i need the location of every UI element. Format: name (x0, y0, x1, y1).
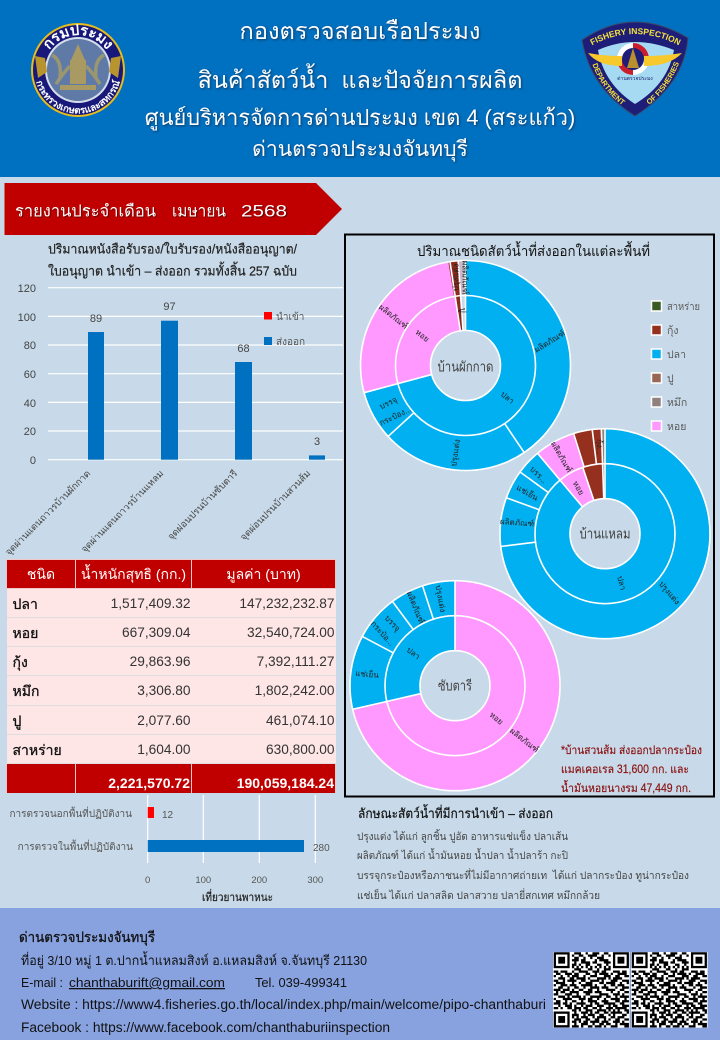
bar chart: certificates by checkpoint: 97 (163, 301, 176, 313)
axis labels: checkpoints (3, 468, 313, 558)
legend: species: สาหร่าย (667, 301, 700, 313)
axis labels: checkpoints: จุดผ่อนปรนบ้านซับตารี (165, 468, 240, 543)
bar chart: vehicle trips: 100 (195, 875, 211, 886)
ring labels: แช่เย็น (355, 668, 380, 680)
note: Ban Suan Som exports: แมคเคอเรล 31,600 กก. และ (561, 764, 689, 776)
centre label: Ban Phak Kat: บ้านผักกาด (438, 358, 494, 374)
bar chart: vehicle trips: 280 (313, 843, 330, 854)
table: weight and value by species: 2,077.60 (137, 713, 190, 728)
ring labels: แช่เย็น (515, 482, 541, 503)
ring labels: ปรุงแต่ง (657, 580, 682, 606)
chart title: certificates: ใบอนุญาต นำเข้า – ส่งออก รวมทั้งสิ้น 257 ฉบับ (48, 262, 297, 280)
ring labels: ผลิตภัณฑ์ (460, 260, 470, 295)
panel: species exported per area (345, 234, 714, 796)
text block: product characteristics: บรรจุกระป๋องหรือภาชนะที่ไม่มีอากาศถ่ายเท ได้แก่ ปลากระป๋อง ทูน่ากระป๋อง (357, 868, 689, 882)
footer contact text: E-mail : (21, 975, 63, 990)
ring labels: ผลิตภัณฑ์ (508, 726, 541, 754)
legend: species: ปู (667, 373, 674, 385)
ring labels: ผลิตภัณฑ์ (500, 516, 534, 528)
ring labels: ผลิตภัณฑ์ (532, 328, 567, 355)
bar chart: vehicle trips: 300 (307, 875, 323, 886)
text block: product characteristics: ผลิตภัณฑ์ ได้แก่ น้ำมันหอย น้ำปลา น้ำปลาร้า กะปิ (357, 848, 568, 862)
table: weight and value by species: 1,802,242.00 (255, 683, 334, 698)
legend: species: กุ้ง (667, 325, 678, 337)
bar chart: vehicle trips: การตรวจนอกพื้นที่ปฏิบัติงาน (9, 806, 132, 820)
bar chart: certificates by checkpoint: 80 (24, 340, 36, 352)
ring labels: บรรจุ (383, 614, 402, 634)
table: weight and value by species: 1,517,409.32 (111, 596, 190, 611)
ring labels: ปรุงแต่ง (434, 584, 447, 613)
title line 1: กองตรวจสอบเรือประมง (240, 19, 480, 45)
ring labels: ปลา (405, 645, 422, 661)
centre label: Ban Laem: บ้านแหลม (580, 526, 630, 542)
ring labels: ปรุงแต่ง (449, 439, 462, 467)
banner: monthly report: รายงานประจำเดือน (15, 202, 156, 220)
footer contact text (19, 929, 546, 1035)
legend: species: หอย (667, 421, 686, 433)
footer band (0, 908, 720, 1040)
chart title: certificates (48, 242, 297, 280)
legend: bar chart: ส่งออก (276, 337, 305, 348)
bar chart: certificates by checkpoint: 100 (18, 312, 36, 324)
bar chart: certificates by checkpoint: 0 (30, 455, 36, 467)
axis labels: checkpoints: จุดผ่านแดนถาวรบ้านแหลม (79, 468, 166, 555)
table: weight and value by species: สาหร่าย (12, 742, 62, 758)
bar chart: vehicle trips: 12 (162, 810, 174, 821)
ring labels: ปลา (615, 575, 628, 591)
legend: species: ปลา (667, 349, 686, 361)
banner: monthly report (4, 183, 342, 235)
axis title: เที่ยวยานพาหนะ (202, 889, 273, 904)
ring labels: หอย (571, 479, 586, 497)
table: weight and value by species: 3,306.80 (137, 683, 190, 698)
donut: Ban Laem (482, 410, 720, 657)
bar chart: certificates by checkpoint: 3 (314, 436, 320, 448)
bar chart: certificates by checkpoint (3, 283, 343, 558)
text block: product characteristics (357, 829, 689, 902)
title line 3: ศูนย์บริหารจัดการด่านประมง เขต 4 (สระแก้ว) (145, 105, 575, 130)
logo: fishery inspection shield: FISHERY INSPECTION (590, 28, 681, 46)
note: Ban Suan Som exports (561, 744, 702, 795)
logo: department of fisheries seal: กระทรวงเกษตรและสหกรณ์ (36, 78, 120, 114)
footer contact text: Website : https://www4.fisheries.go.th/local/index.php/main/welcome/pipo-chanthaburi (21, 997, 546, 1012)
legend: bar chart: นำเข้า (276, 311, 304, 323)
bar chart: vehicle trips: การตรวจในพื้นที่ปฏิบัติงาน (18, 839, 133, 853)
bar chart: vehicle trips (9, 795, 330, 904)
donut: Ban Phak Kat (358, 258, 573, 473)
ring labels: ปลา (499, 390, 516, 406)
panel heading: ปริมาณชนิดสัตว์น้ำที่ส่งออกในแต่ละพื้นที่ (417, 241, 650, 259)
legend: species: หมึก (667, 397, 687, 409)
title line 2: สินค้าสัตว์น้ำ และปัจจัยการผลิต (198, 67, 522, 93)
bar chart: certificates by checkpoint: 20 (24, 426, 36, 438)
logo: fishery inspection shield (582, 22, 688, 116)
QR code 1 (553, 952, 630, 1028)
chart title: certificates: ปริมาณหนังสือรับรอง/ใบรับรอง/หนังสืออนุญาต/ (48, 242, 297, 258)
ring labels (500, 439, 682, 606)
bar chart: certificates by checkpoint: 89 (90, 313, 102, 325)
bar chart: certificates by checkpoint: 40 (24, 398, 36, 410)
bar chart: certificates by checkpoint: 68 (237, 343, 250, 355)
table: weight and value by species: 29,863.96 (130, 654, 190, 669)
footer contact text: chanthaburift@gmail.com (69, 975, 225, 990)
logo: department of fisheries seal (31, 23, 125, 117)
QR code 2 (631, 952, 708, 1028)
heading: product characteristics: ลักษณะสัตว์น้ำที่มีการนำเข้า – ส่งออก (358, 804, 553, 821)
ring labels: ปรุงแต่ง (452, 264, 461, 291)
ring labels: กุ้ง... (595, 439, 604, 454)
table: weight and value by species: 32,540,724.00 (247, 625, 334, 640)
table: weight and value by species: กุ้ง (12, 654, 28, 670)
ring labels: ผลิตภัณฑ์ (377, 302, 410, 331)
ring labels: บรรจุ (378, 395, 399, 411)
banner: monthly report: 2568 (241, 202, 287, 220)
table: weight and value by species: 2,221,570.72 (108, 775, 190, 791)
table: weight and value by species (6, 559, 336, 793)
ring labels: กระป๋อง... (378, 405, 413, 428)
bar chart: vehicle trips: 0 (145, 875, 150, 886)
table: weight and value by species: หมึก (12, 683, 39, 699)
logo: fishery inspection shield: DEPARTMENT (592, 63, 626, 104)
text block: product characteristics: แช่เย็น ได้แก่ ปลาสลิด ปลาสวาย ปลายี่สกเทศ หมึกกล้วย (357, 888, 600, 902)
table: weight and value by species: 667,309.04 (122, 625, 190, 640)
table: weight and value by species: 630,800.00 (266, 742, 334, 757)
banner: monthly report: เมษายน (172, 202, 226, 220)
table: weight and value by species: หอย (12, 625, 38, 641)
bar chart: vehicle trips: 200 (251, 875, 267, 886)
table: weight and value by species: 7,392,111.27 (257, 654, 334, 669)
axis labels: checkpoints: จุดผ่อนปรนบ้านสวนส้ม (238, 468, 313, 543)
table: weight and value by species: 1,604.00 (137, 742, 190, 757)
ring labels (355, 584, 541, 754)
bar chart: certificates by checkpoint: 60 (24, 369, 36, 381)
footer contact text: Facebook : https://www.facebook.com/chanthaburiinspection (21, 1020, 390, 1035)
logo: fishery inspection shield: OF FISHERIES (646, 62, 679, 104)
header band (0, 0, 720, 177)
legend: bar chart (264, 311, 305, 348)
title line 4: ด่านตรวจประมงจันทบุรี (252, 138, 468, 161)
footer contact text: ด่านตรวจประมงจันทบุรี (19, 929, 155, 946)
note: Ban Suan Som exports: *บ้านสวนส้ม ส่งออกปลากระป๋อง (561, 744, 702, 757)
table: weight and value by species: ปู (12, 713, 21, 729)
ring labels (377, 260, 567, 467)
text block: product characteristics: ปรุงแต่ง ได้แก่ ลูกชิ้น ปูอัด อาหารแช่แข็ง ปลาเส้น (357, 829, 568, 843)
bar chart: certificates by checkpoint: 120 (18, 283, 36, 295)
table: weight and value by species: ปลา (12, 596, 38, 612)
axis labels: checkpoints: จุดผ่านแดนถาวรบ้านผักกาด (3, 468, 93, 558)
note: Ban Suan Som exports: น้ำมันหอยนางรม 47,449 กก. (561, 780, 691, 795)
ring labels: ปู... (457, 308, 467, 319)
donut: Sap Tari (350, 581, 560, 791)
table: weight and value by species: 190,059,184.24 (237, 775, 334, 791)
logo: fishery inspection shield: ด่านตรวจประมง (617, 76, 653, 82)
ring labels: กระป๋อ... (369, 619, 396, 648)
centre label: Sap Tari: ซับตารี (438, 678, 472, 694)
table: weight and value by species: 461,074.10 (266, 713, 334, 728)
ring labels: บรร... (528, 465, 549, 485)
table: weight and value by species: น้ำหนักสุทธิ (กก.) (81, 566, 186, 582)
table: weight and value by species: มูลค่า (บาท) (226, 566, 301, 582)
footer contact text: Tel. 039-499341 (255, 975, 347, 990)
table: weight and value by species: ชนิด (27, 566, 55, 582)
ring labels: ผลิตภัณฑ์ (405, 590, 427, 625)
legend: species (652, 301, 700, 433)
table: weight and value by species: 147,232,232.87 (239, 596, 334, 611)
footer contact text: ที่อยู่ 3/10 หมู่ 1 ต.ปากน้ำแหลมสิงห์ อ.แหลมสิงห์ จ.จันทบุรี 21130 (21, 951, 367, 969)
ring labels: ผลิตภัณฑ์ (549, 439, 575, 474)
logo: department of fisheries seal: กรมประมง (44, 24, 112, 50)
ring labels: หอย (488, 710, 505, 727)
ring labels: หอย (414, 328, 431, 344)
